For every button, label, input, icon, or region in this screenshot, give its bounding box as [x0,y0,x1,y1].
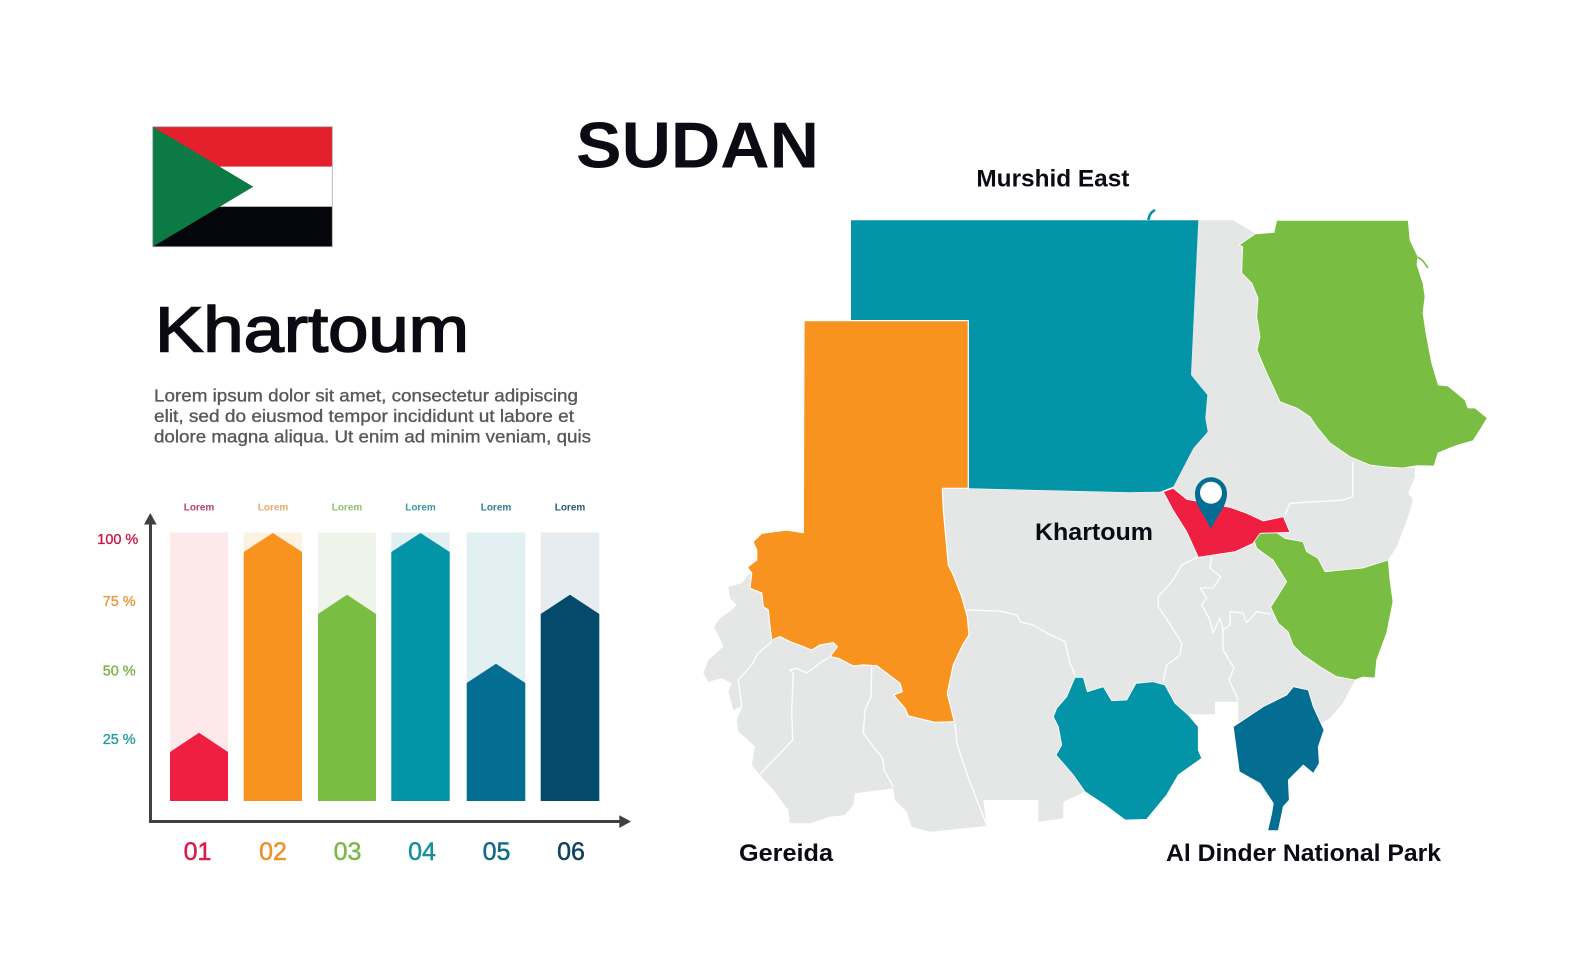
map label: Khartoum: Khartoum [1035,519,1153,546]
y-axis percent labels: 100 % [97,531,138,548]
bar 04: 04 [408,838,436,866]
chart axes [144,513,631,828]
bar 03: 03 [334,838,361,866]
map of Sudan [703,166,1487,867]
bar 04: Lorem [405,503,436,514]
y-axis percent labels: 75 % [103,593,136,610]
bar 02 [244,503,302,866]
icon: location pin [1195,477,1227,530]
bar chart [97,503,631,866]
flag of Sudan [153,127,332,247]
description text block: Lorem ipsum dolor sit amet, consectetur adipiscing [154,386,578,406]
y-axis percent labels [97,531,138,748]
region: orange west [747,321,969,722]
map label: Murshid East: Murshid East [976,166,1129,193]
bar 05 [467,503,525,866]
region: Khartoum (red) [1163,488,1290,557]
bar 03 [318,503,376,866]
map base: grey regions [703,220,1415,832]
region: Murshid East (teal north) [851,210,1208,492]
description text block: dolore magna aliqua. Ut enim ad minim veniam, quis [154,426,591,446]
bar 05: Lorem [481,503,511,514]
bar 01: Lorem [184,503,214,514]
heading: Khartoum: Khartoum [155,294,469,366]
map label: Al Dinder National Park: Al Dinder National Park [1166,840,1442,867]
region: green north-east [1239,220,1487,468]
internal region borders [735,462,1353,825]
bar 01 [170,503,228,866]
y-axis percent labels: 50 % [103,662,136,679]
bar 05: 05 [483,838,510,866]
region: Al Dinder National Park (blue) [1233,687,1324,831]
description text block: elit, sed do eiusmod tempor incididunt ut labore et [154,406,574,426]
bar 02: Lorem [258,503,288,514]
bar 06 [541,503,599,866]
y-axis percent labels: 25 % [103,731,136,748]
description text block [154,386,591,446]
bar 02: 02 [259,838,287,866]
bar 01: 01 [184,838,211,866]
bar 06: Lorem [555,503,585,514]
region: green south-east [1253,533,1393,680]
bar 03: Lorem [332,503,362,514]
region: teal south [1053,677,1202,820]
bar 04 [391,503,450,866]
map label: Gereida: Gereida [739,840,834,867]
bar 06: 06 [557,838,585,866]
title: SUDAN: SUDAN [576,108,819,182]
